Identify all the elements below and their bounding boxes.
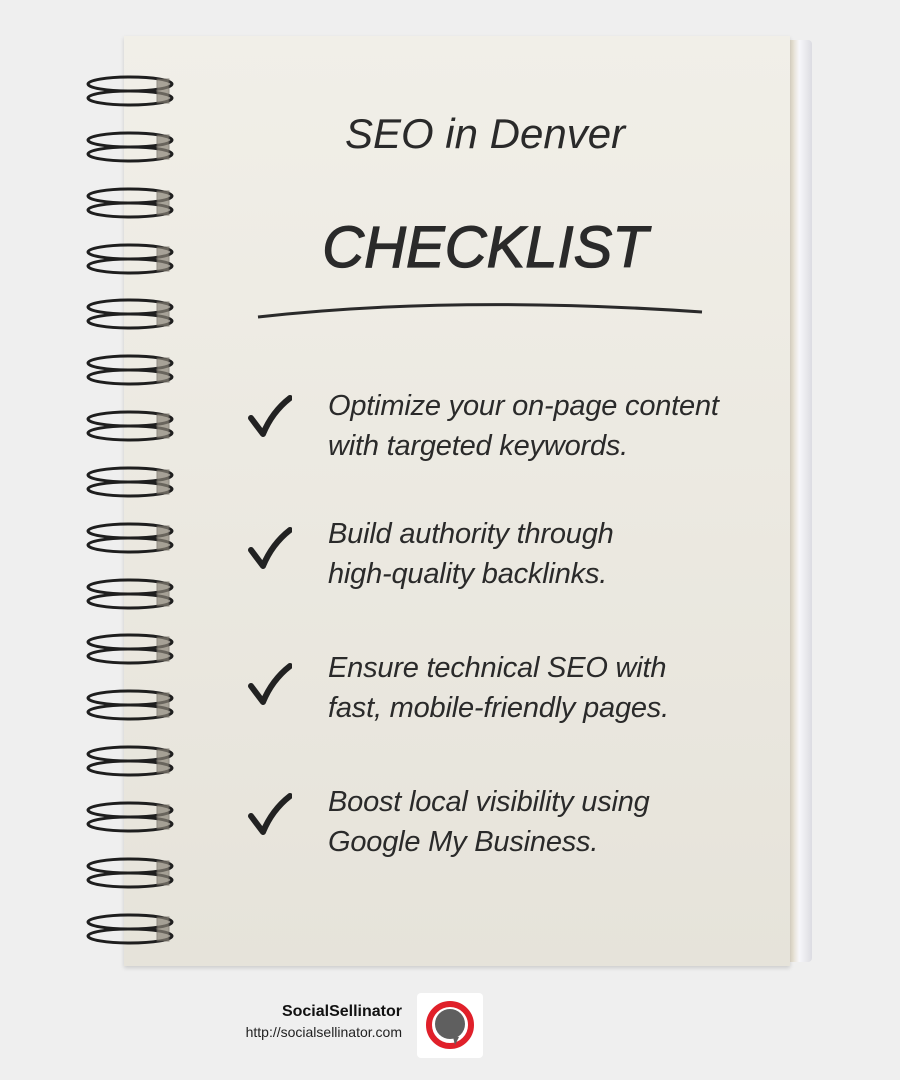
checklist items: with targeted keywords. (328, 430, 628, 462)
checklist items: Build authority through (328, 518, 614, 550)
notebook page stack edge (780, 40, 812, 962)
notebook page (124, 36, 790, 966)
footer brand text: SocialSellinator (282, 1003, 402, 1020)
logo (417, 993, 483, 1058)
checklist items: high-quality backlinks. (328, 558, 607, 590)
title: SEO in Denver (345, 110, 625, 157)
item 1 (248, 390, 720, 462)
footer brand text (246, 1003, 402, 1040)
checklist items: Boost local visibility using (328, 786, 650, 818)
checklist items: fast, mobile-friendly pages. (328, 692, 669, 724)
underline stroke (258, 303, 702, 318)
checklist items (248, 390, 720, 858)
footer brand text: http://socialsellinator.com (246, 1024, 402, 1040)
item 2 (248, 518, 614, 590)
heading: checklist: CHECKLIST (322, 215, 648, 280)
checklist items: Google My Business. (328, 826, 598, 858)
spiral binding (86, 76, 174, 944)
item 4 (248, 786, 650, 858)
checklist items: Optimize your on-page content (328, 390, 719, 422)
item 3 (248, 652, 669, 724)
checklist items: Ensure technical SEO with (328, 652, 666, 684)
